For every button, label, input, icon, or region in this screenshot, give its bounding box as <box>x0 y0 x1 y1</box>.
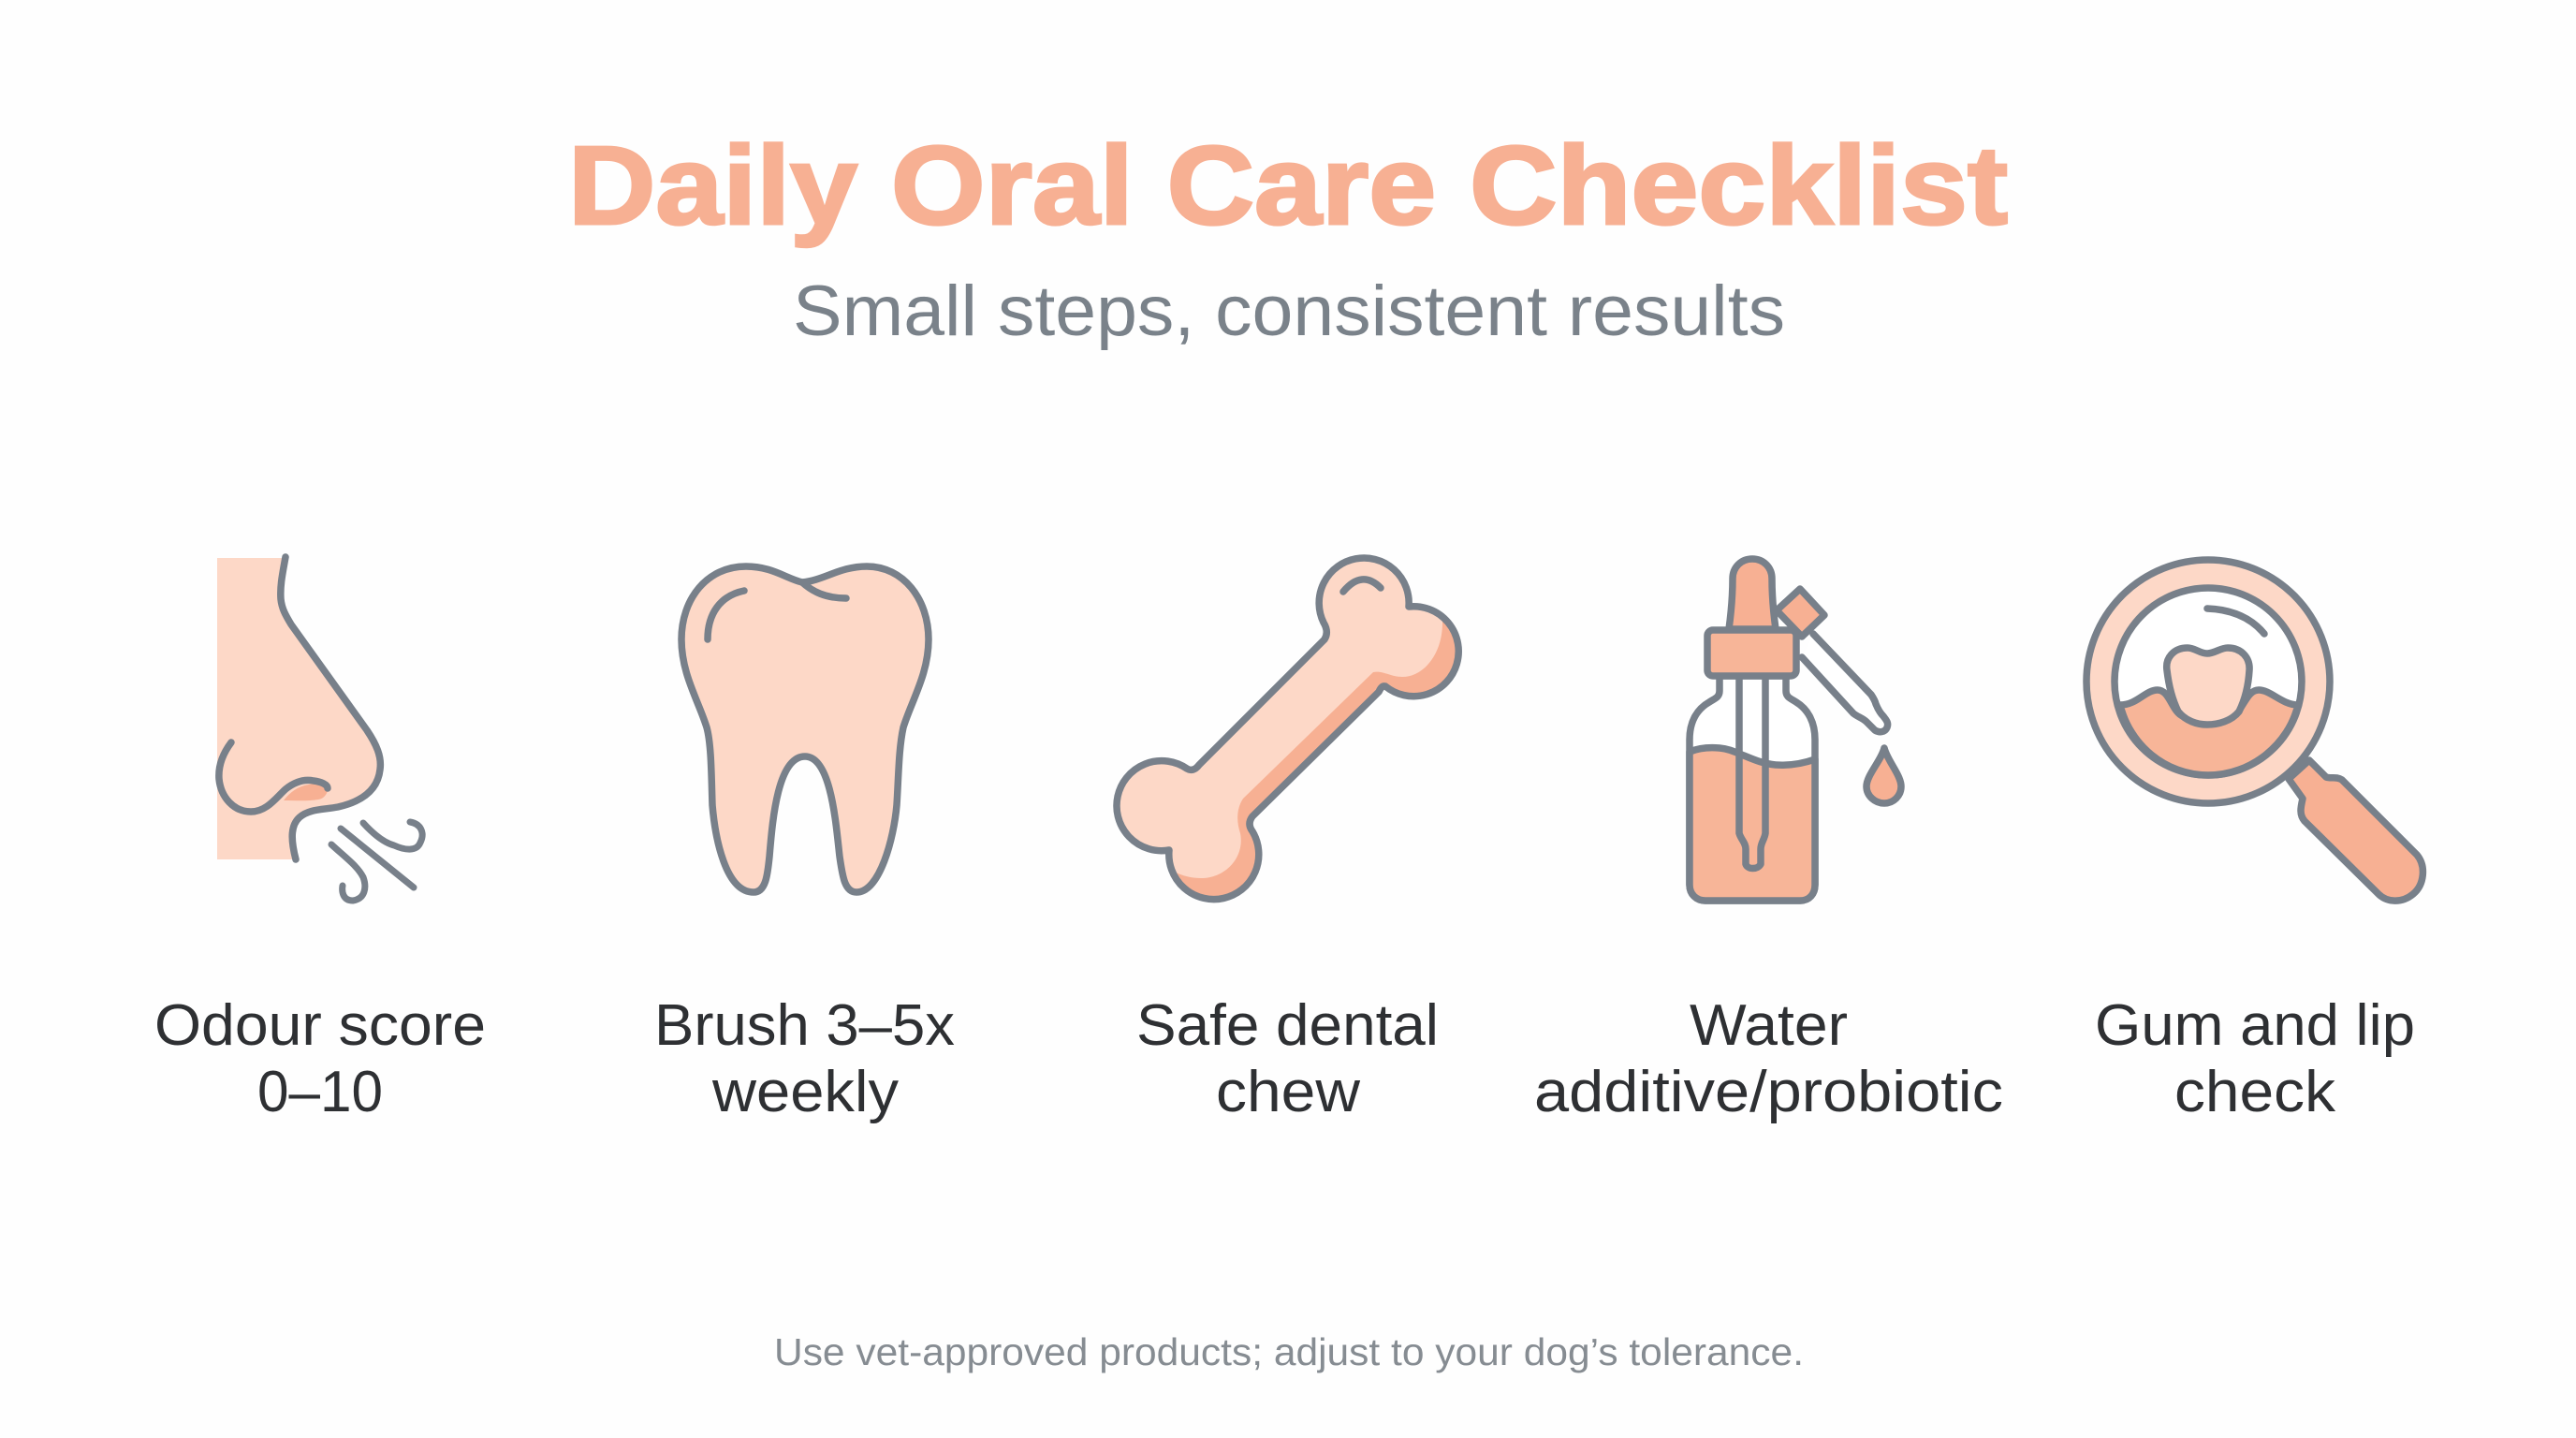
icon: nose with odour <box>217 557 422 901</box>
label: water additive: additive/probiotic <box>1534 1060 2003 1124</box>
label: odour score <box>154 993 486 1124</box>
icon: tooth <box>681 566 929 892</box>
label: safe dental chew: chew <box>1216 1060 1360 1124</box>
label: safe dental chew <box>1136 993 1439 1124</box>
label: brush <box>654 993 955 1124</box>
label: odour score: 0–10 <box>257 1060 383 1124</box>
title: Daily Oral Care Checklist <box>568 124 2008 248</box>
label: gum and lip check: Gum and lip <box>2095 993 2415 1058</box>
subtitle: Small steps, consistent results <box>793 271 1785 351</box>
label: brush: Brush 3–5x <box>654 993 955 1058</box>
label: gum and lip check <box>2095 993 2415 1124</box>
footer note: Use vet-approved products; adjust to your dog’s tolerance. <box>774 1330 1804 1373</box>
label: odour score: Odour score <box>154 993 486 1058</box>
icon: dental chew bone <box>1095 548 1458 900</box>
label: brush: weekly <box>711 1060 899 1124</box>
label: water additive: Water <box>1690 993 1848 1058</box>
icon: magnifier over gum and tooth <box>2086 560 2422 901</box>
icon: water additive dropper bottle <box>1690 559 1901 901</box>
label: gum and lip check: check <box>2174 1060 2336 1124</box>
label: water additive <box>1534 993 2003 1124</box>
label: safe dental chew: Safe dental <box>1136 993 1439 1058</box>
